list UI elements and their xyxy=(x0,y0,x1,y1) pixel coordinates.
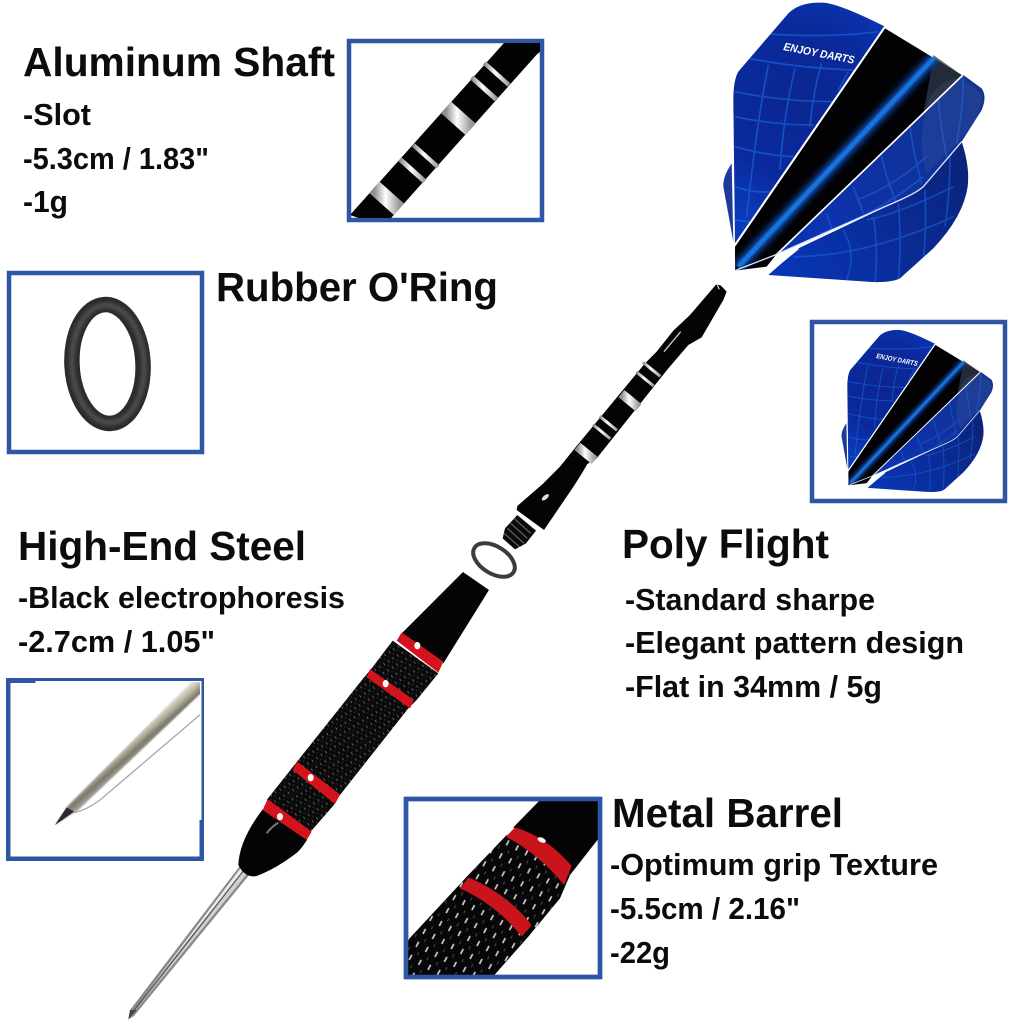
text block: Aluminum Shaft specs: -5.3cm / 1.83" xyxy=(23,142,209,176)
flight brand text: ENJOY DARTS xyxy=(782,41,856,67)
icon: dart shaft xyxy=(503,285,727,549)
text block: Poly Flight specs: -Standard sharpe xyxy=(625,583,875,617)
icon: dart needle xyxy=(128,867,250,1019)
heading: Poly Flight: Poly Flight xyxy=(622,521,829,567)
panel: aluminum shaft close-up xyxy=(349,34,553,227)
text block: High-End Steel specs: -Black electrophoresis xyxy=(18,581,345,615)
text block: Metal Barrel specs: -22g xyxy=(610,936,670,970)
text block: Aluminum Shaft specs: -Slot xyxy=(23,98,91,132)
text block: Metal Barrel specs: -5.5cm / 2.16" xyxy=(610,892,800,926)
heading: Aluminum Shaft: Aluminum Shaft xyxy=(23,39,335,85)
panel: steel tip close-up xyxy=(6,678,204,861)
text block: Aluminum Shaft specs xyxy=(23,98,209,219)
panel: flight close-up xyxy=(812,322,1005,501)
text block: Metal Barrel specs xyxy=(610,848,938,970)
icon: flight main xyxy=(723,3,984,283)
text block: Poly Flight specs: -Elegant pattern design xyxy=(625,626,964,660)
text block: Poly Flight specs: -Flat in 34mm / 5g xyxy=(625,670,882,704)
panel: rubber o-ring close-up xyxy=(9,273,202,452)
text block: High-End Steel specs: -2.7cm / 1.05" xyxy=(18,625,215,659)
heading: High-End Steel: High-End Steel xyxy=(18,523,306,569)
heading: Rubber O'Ring: Rubber O'Ring xyxy=(216,264,498,310)
text block: Metal Barrel specs: -Optimum grip Texture xyxy=(610,848,938,882)
icon: small rubber o-ring xyxy=(467,536,521,584)
heading: Metal Barrel: Metal Barrel xyxy=(612,790,843,836)
text block: Aluminum Shaft specs: -1g xyxy=(23,185,68,219)
text block: High-End Steel specs xyxy=(18,581,345,659)
text block: Poly Flight specs xyxy=(625,583,964,704)
icon: dart barrel xyxy=(238,572,489,876)
dart assembly xyxy=(128,285,727,1019)
flight close-up brand text: ENJOY DARTS xyxy=(876,353,918,368)
panel: metal barrel close-up xyxy=(403,799,600,980)
